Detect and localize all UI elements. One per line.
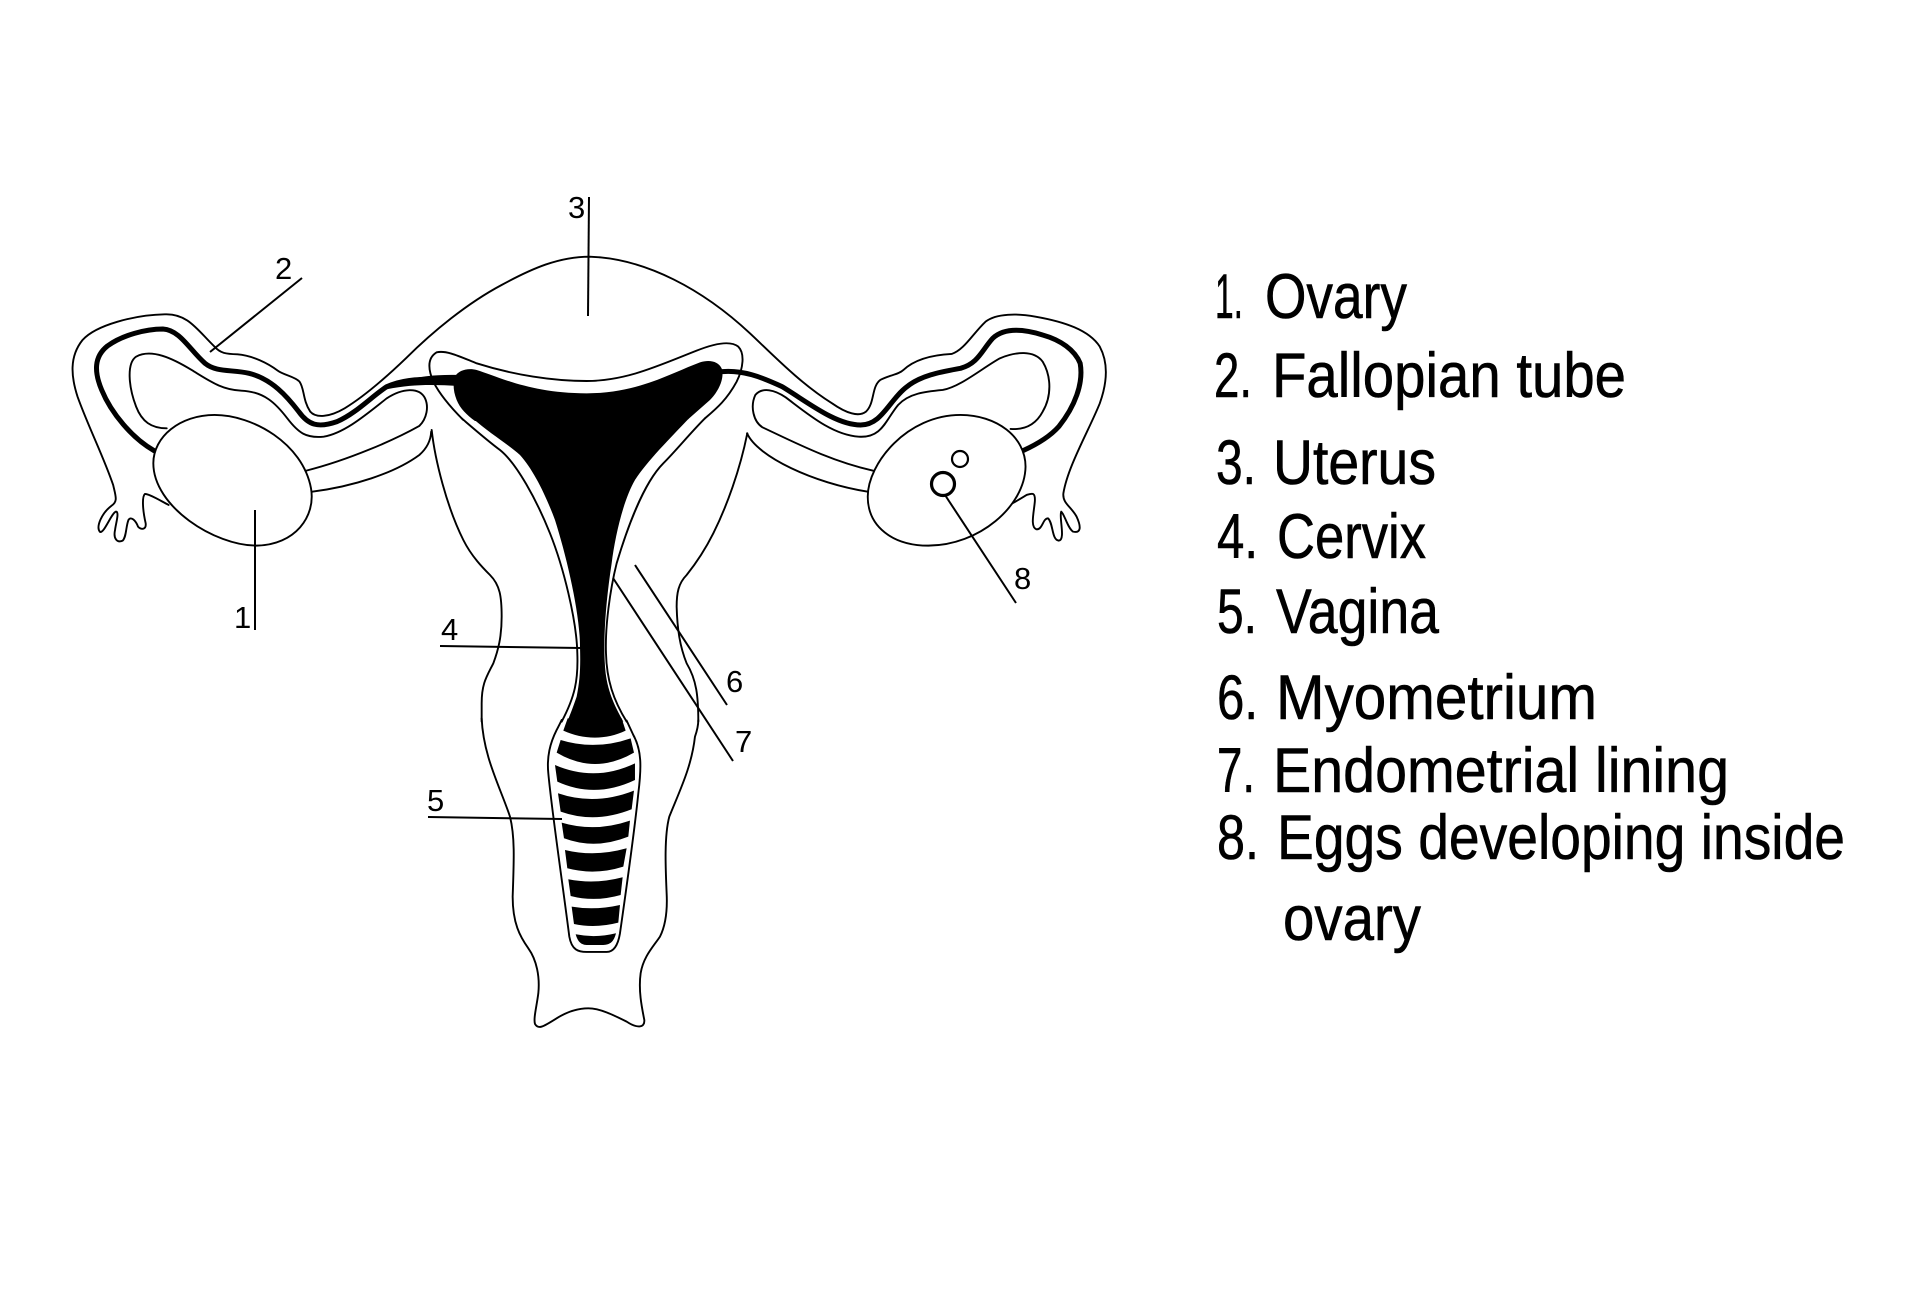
right tube inner wall and ligament <box>753 353 1049 471</box>
legend item 7: Endometrial lining <box>1273 736 1729 806</box>
diagram number 4: 4 <box>441 612 458 647</box>
right fallopian tube and ovary <box>600 257 1106 546</box>
right uterus dome and tube outer wall <box>600 257 1106 541</box>
leader line 5 <box>428 817 562 819</box>
legend item 6: 6. <box>1217 663 1258 733</box>
fundus cavity <box>454 361 723 421</box>
small egg <box>952 451 968 467</box>
legend item 1: 1. <box>1215 262 1243 332</box>
tapering cavity <box>473 418 689 722</box>
right body outline <box>677 433 747 722</box>
legend item 1: Ovary <box>1265 262 1407 332</box>
leader line 2 <box>210 278 302 352</box>
leader line 7 <box>613 578 733 761</box>
left tube widening into uterus <box>387 375 459 389</box>
left uterus wall <box>462 418 577 722</box>
legend item 4: 4. <box>1217 502 1258 572</box>
legend item 5 <box>1217 577 1440 647</box>
vaginal rugae bands <box>555 738 635 945</box>
large egg <box>932 472 954 496</box>
left body outline <box>432 430 502 722</box>
legend item 6: Myometrium <box>1276 663 1597 733</box>
left ovary <box>153 415 312 546</box>
diagram number 5: 5 <box>427 783 444 818</box>
diagram: female reproductive system <box>73 190 1106 1027</box>
legend item 2: Fallopian tube <box>1272 341 1626 411</box>
legend <box>1214 262 1845 954</box>
right uterus wall <box>606 418 705 722</box>
legend item 4: Cervix <box>1277 502 1426 572</box>
left tube lumen <box>96 329 456 451</box>
legend item 4 <box>1217 502 1426 572</box>
legend item 3: 3. <box>1216 428 1256 498</box>
fundus wall <box>429 343 743 420</box>
diagram number 2: 2 <box>275 251 292 286</box>
leader line 4 <box>440 646 581 648</box>
uterine body and neck <box>432 418 747 722</box>
diagram number 1: 1 <box>234 600 251 635</box>
leader line 8 <box>945 495 1016 603</box>
legend item 3: Uterus <box>1273 428 1436 498</box>
cervix and vagina <box>482 718 698 1027</box>
left tube inner wall and ligament <box>130 354 427 471</box>
canal outline <box>548 720 640 952</box>
legend item 8: 8. <box>1217 803 1259 873</box>
leader line 1 <box>254 510 256 630</box>
legend item 1 <box>1215 262 1407 332</box>
diagram number 8: 8 <box>1014 561 1031 596</box>
left lower ligament <box>312 432 431 492</box>
right lower ligament <box>747 433 868 492</box>
legend item 8: ovary <box>1283 884 1421 954</box>
legend item 5: 5. <box>1217 577 1257 647</box>
leader line 6 <box>635 565 727 705</box>
diagram number 3: 3 <box>568 190 585 225</box>
legend item 2: 2. <box>1214 341 1252 411</box>
vaginal outer wall <box>482 718 698 1027</box>
leader line 3 <box>588 197 589 316</box>
legend item 8: Eggs developing inside <box>1277 803 1845 873</box>
legend item 7: 7. <box>1217 736 1255 806</box>
right tube lumen <box>722 330 1081 451</box>
developing eggs <box>932 451 968 496</box>
diagram number 6: 6 <box>726 664 743 699</box>
right ovary <box>868 415 1026 546</box>
left tube outer wall and uterus dome <box>73 257 600 541</box>
uterine fundus <box>429 343 743 421</box>
legend item 3 <box>1216 428 1436 498</box>
cervical opening <box>563 718 626 738</box>
legend item 8 <box>1217 803 1845 954</box>
diagram number 7: 7 <box>735 724 752 759</box>
legend item 5: Vagina <box>1276 577 1440 647</box>
left fallopian tube and ovary <box>73 257 600 546</box>
